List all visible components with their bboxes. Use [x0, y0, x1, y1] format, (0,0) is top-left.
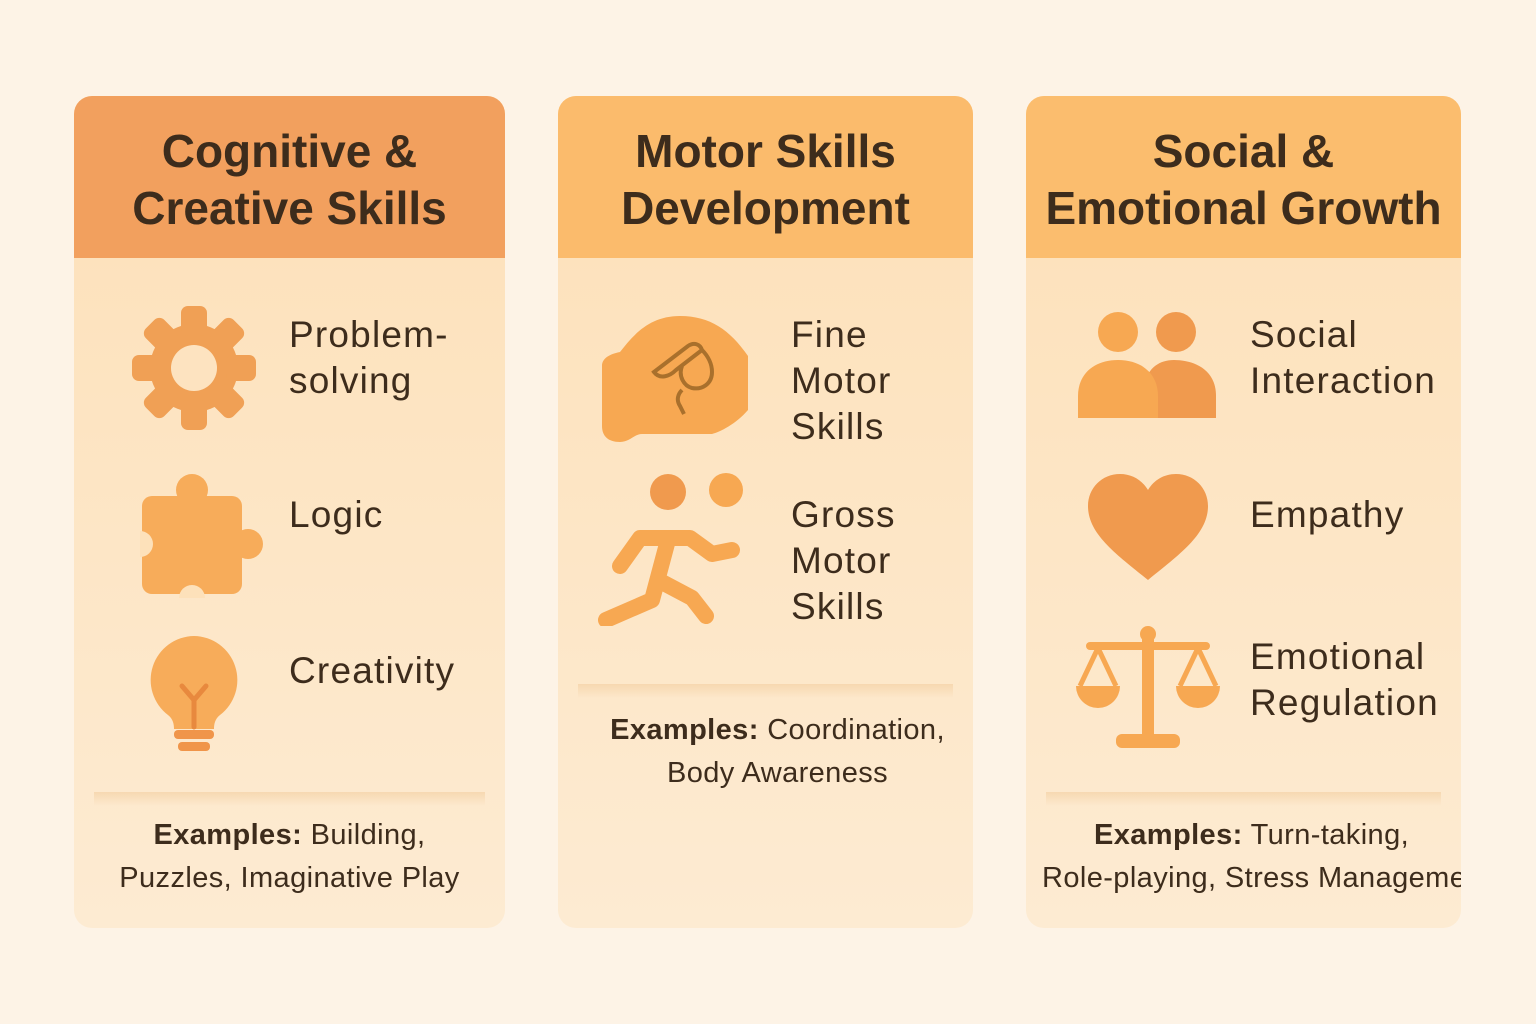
- text: emotional regulation: Regulation: [1250, 682, 1439, 723]
- examples: motor: [610, 714, 945, 789]
- header: social: Social &: [1153, 125, 1334, 177]
- text: logic: Logic: [289, 494, 383, 535]
- header: motor: [558, 96, 973, 258]
- text: problem-solving: solving: [289, 360, 413, 401]
- text: problem-solving: Problem-: [289, 314, 449, 355]
- icon: puzzle: [140, 474, 263, 598]
- text: creativity: Creativity: [289, 650, 455, 691]
- text: social interaction: [1250, 314, 1436, 401]
- text: fine motor skills: [791, 314, 892, 447]
- header: motor: Motor Skills: [635, 125, 896, 177]
- examples: social: [1042, 819, 1461, 894]
- text: gross motor skills: [791, 494, 896, 627]
- icon: two people: [1078, 312, 1216, 418]
- text: social interaction: Social: [1250, 314, 1358, 355]
- text: fine motor skills: Skills: [791, 406, 885, 447]
- icon: lightbulb: [150, 636, 238, 751]
- text: emotional regulation: [1250, 636, 1439, 723]
- header: cognitive: Creative Skills: [132, 182, 447, 234]
- text: fine motor skills: Motor: [791, 360, 892, 401]
- header: cognitive: [74, 96, 505, 258]
- icon: heart: [1088, 474, 1208, 580]
- header: social: [1026, 96, 1461, 258]
- header: cognitive: Cognitive &: [162, 125, 417, 177]
- panel: motor: [558, 96, 973, 928]
- panel: social: [1026, 96, 1461, 928]
- examples: cognitive: [119, 819, 460, 894]
- examples: motor: Body Awareness: [667, 757, 888, 789]
- text: social interaction: Interaction: [1250, 360, 1436, 401]
- text: gross motor skills: Gross: [791, 494, 896, 535]
- header: social: Emotional Growth: [1045, 182, 1442, 234]
- examples: cognitive: Puzzles, Imaginative Play: [119, 862, 460, 894]
- text: problem-solving: [289, 314, 449, 401]
- text: gross motor skills: Skills: [791, 586, 885, 627]
- icon: running figure: [598, 473, 743, 626]
- examples: social: Examples: Turn-taking,: [1094, 819, 1409, 851]
- header: motor: Development: [621, 182, 910, 234]
- text: gross motor skills: Motor: [791, 540, 892, 581]
- icon: fine motor hand: [602, 316, 748, 442]
- panel: cognitive: [74, 96, 505, 928]
- examples: cognitive: Examples: Building,: [154, 819, 425, 851]
- text: emotional regulation: Emotional: [1250, 636, 1425, 677]
- examples: motor: Examples: Coordination,: [610, 714, 945, 746]
- icon: gear: [132, 306, 256, 430]
- text: empathy: Empathy: [1250, 494, 1404, 535]
- icon: scales: [1076, 626, 1220, 748]
- text: fine motor skills: Fine: [791, 314, 868, 355]
